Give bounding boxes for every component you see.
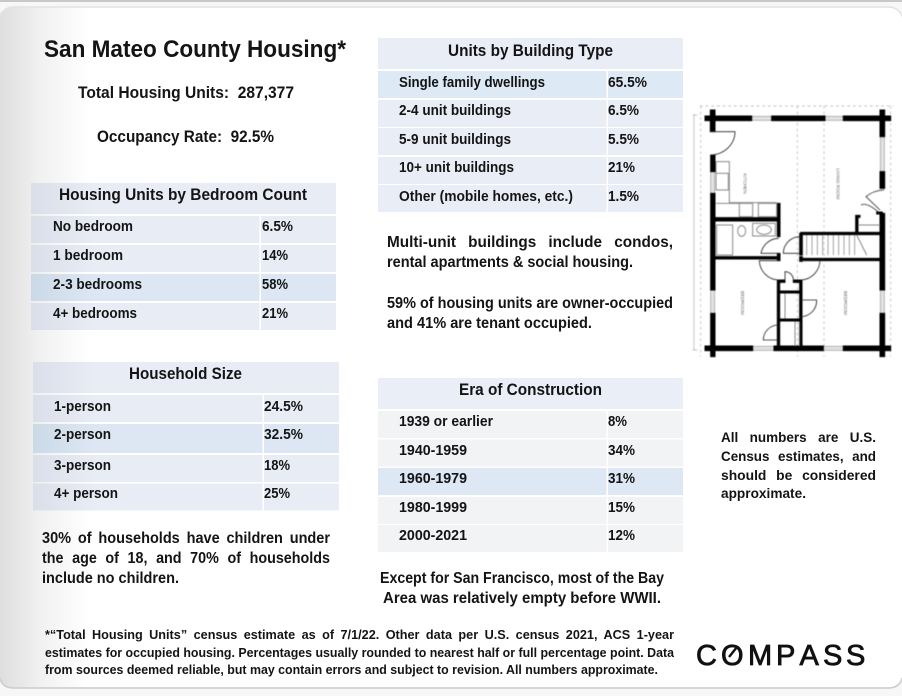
- row: 4+ person: [54, 486, 290, 502]
- row: other: Other (mobile homes, etc.): [399, 189, 573, 205]
- text: multi-unit buildings: rental apartments & social housing.: [387, 254, 633, 271]
- table heading: Era of Construction: [459, 380, 602, 399]
- row: 1939 or earlier: 8%: [608, 414, 627, 430]
- row: 1-person: [54, 399, 303, 415]
- text: census note: [721, 429, 876, 501]
- text: multi-unit buildings: [387, 234, 673, 271]
- text: except for san francisco: Area was relatively empty before WWII.: [383, 590, 661, 607]
- text: owner and tenant occupancy: 59% of housing units are owner-occupied: [387, 295, 673, 312]
- row: no bedroom: 6.5%: [262, 219, 293, 235]
- text: census note: Census estimates, and: [721, 448, 876, 464]
- row: 10+ unit buildings: [399, 160, 635, 176]
- row: 2-4 unit buildings: 2-4 unit buildings: [399, 103, 511, 119]
- compass logo: COMPASS: [696, 640, 865, 672]
- floor plan illustration: [693, 106, 893, 357]
- row: 4+ person: 4+ person: [54, 486, 118, 502]
- row: 1980-1999: 1980-1999: [399, 500, 467, 516]
- footnote: *“Total Housing Units” census estimate as of 7/1/22. Other data per U.S. census 2021, ACS 1-year: [45, 627, 674, 642]
- room labels: KITCHEN: [742, 173, 747, 194]
- text: census note: All numbers are U.S.: [721, 429, 876, 445]
- table: units by building type: [378, 38, 683, 212]
- row: 1-person: 1-person: [54, 399, 111, 415]
- row: single family dwellings: Single family dwellings: [399, 75, 545, 91]
- row: 1-person: 24.5%: [264, 399, 303, 415]
- fixtures: [716, 162, 880, 346]
- row: 4+ bedrooms: 4+ bedrooms: [53, 306, 137, 322]
- row: 1 bedroom: 14%: [262, 248, 288, 264]
- footnote: [45, 627, 675, 677]
- row: 3-person: 3-person: [54, 458, 111, 474]
- text: multi-unit buildings: Multi-unit buildings include condos,: [387, 234, 673, 251]
- row: 1940-1959: 1940-1959: [399, 443, 467, 459]
- room labels: [740, 168, 848, 315]
- table: era of construction: [378, 378, 683, 552]
- row: 1960-1979: 31%: [608, 471, 635, 487]
- row: 2-4 unit buildings: [399, 103, 639, 119]
- row: 2000-2021: 12%: [608, 528, 635, 544]
- footnote: estimates for occupied housing. Percentages usually rounded to nearest half or full percentage point. Data: [45, 645, 675, 660]
- row: 2-person: 2-person: [54, 427, 111, 443]
- row: 1940-1959: [399, 443, 635, 459]
- row: 5-9 unit buildings: [399, 132, 639, 148]
- row: 5-9 unit buildings: 5-9 unit buildings: [399, 132, 511, 148]
- row: single family dwellings: [399, 75, 647, 91]
- row: 2000-2021: [399, 528, 635, 544]
- occupancy rate: Occupancy Rate: 92.5%: [97, 128, 274, 146]
- row: other: 1.5%: [608, 189, 639, 205]
- table: household size: [33, 362, 339, 511]
- table: housing units by bedroom count: [31, 183, 336, 330]
- windows: [711, 116, 884, 350]
- row: 2-3 bedrooms: 58%: [262, 277, 288, 293]
- walls: [705, 110, 891, 357]
- row: 5-9 unit buildings: 5.5%: [608, 132, 639, 148]
- table heading: Household Size: [129, 364, 242, 383]
- row: 10+ unit buildings: 10+ unit buildings: [399, 160, 514, 176]
- row: 1980-1999: [399, 500, 635, 516]
- row: 4+ bedrooms: 21%: [262, 306, 288, 322]
- text: households with children: 30% of households have children under: [42, 530, 330, 547]
- row: 1940-1959: 34%: [608, 443, 635, 459]
- row: 1 bedroom: 1 bedroom: [53, 248, 123, 264]
- total housing units: Total Housing Units: 287,377: [78, 84, 294, 102]
- row: 1939 or earlier: 1939 or earlier: [399, 414, 493, 430]
- table heading: Units by Building Type: [448, 41, 613, 60]
- row: 10+ unit buildings: 21%: [608, 160, 635, 176]
- text: owner and tenant occupancy: and 41% are tenant occupied.: [387, 315, 592, 332]
- row: no bedroom: No bedroom: [53, 219, 133, 235]
- text: except for san francisco: Except for San Francisco, most of the Bay: [380, 570, 664, 587]
- row: 2000-2021: 2000-2021: [399, 528, 467, 544]
- room labels: BEDROOM: [740, 291, 745, 315]
- room labels: LIVING ROOM: [836, 168, 841, 199]
- table heading: Housing Units by Bedroom Count: [59, 185, 307, 204]
- row: 2-3 bedrooms: [53, 277, 288, 293]
- row: 3-person: [54, 458, 290, 474]
- row: 2-3 bedrooms: 2-3 bedrooms: [53, 277, 142, 293]
- door swings: [710, 132, 884, 340]
- title: San Mateo County Housing*: [44, 36, 347, 63]
- text: households with children: the age of 18, and 70% of households: [42, 550, 330, 567]
- row: 1939 or earlier: [399, 414, 627, 430]
- room labels: BEDROOM: [843, 291, 848, 315]
- footnote: from sources deemed reliable, but may contain errors and subject to revision. All numbers approximate.: [45, 662, 658, 677]
- text: households with children: include no children.: [42, 570, 179, 587]
- row: 1 bedroom: [53, 248, 288, 264]
- row: 1960-1979: 1960-1979: [399, 471, 467, 487]
- row: single family dwellings: 65.5%: [608, 75, 647, 91]
- text: except for san francisco: [380, 570, 664, 607]
- row: 3-person: 18%: [264, 458, 290, 474]
- row: 2-person: 32.5%: [264, 427, 303, 443]
- row: 1980-1999: 15%: [608, 500, 635, 516]
- text: owner and tenant occupancy: [387, 295, 673, 332]
- row: no bedroom: [53, 219, 293, 235]
- text: census note: should be considered: [721, 467, 876, 483]
- row: 2-4 unit buildings: 6.5%: [608, 103, 639, 119]
- row: 1960-1979: [399, 471, 635, 487]
- text: households with children: [42, 530, 330, 587]
- row: 4+ person: 25%: [264, 486, 290, 502]
- text: census note: approximate.: [721, 485, 806, 501]
- row: 4+ bedrooms: [53, 306, 288, 322]
- row: 2-person: [54, 427, 303, 443]
